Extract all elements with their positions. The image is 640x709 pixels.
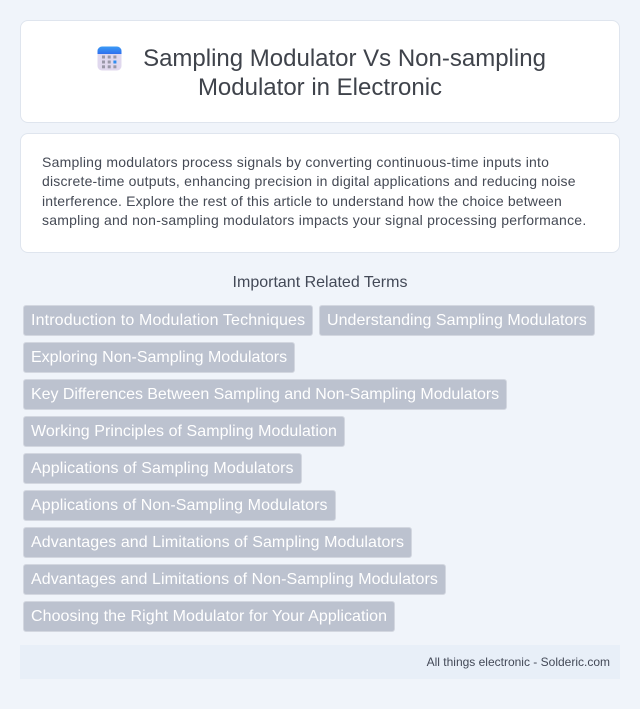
heading: related terms: Important Related Terms bbox=[233, 274, 407, 291]
tag: Introduction to Modulation Techniques bbox=[31, 312, 305, 329]
intro text: sampling and non-sampling modulators impacts your signal processing performance. bbox=[42, 212, 586, 228]
tag bbox=[23, 453, 302, 484]
icon: calendar bbox=[98, 46, 122, 70]
intro text bbox=[42, 154, 586, 228]
intro text: Sampling modulators process signals by converting continuous-time inputs into bbox=[42, 154, 549, 170]
tag: Working Principles of Sampling Modulation bbox=[31, 423, 337, 440]
tag: Understanding Sampling Modulators bbox=[327, 312, 587, 329]
tag: Advantages and Limitations of Sampling Modulators bbox=[31, 534, 404, 551]
tag: Key Differences Between Sampling and Non-Sampling Modulators bbox=[31, 386, 499, 403]
tag bbox=[319, 305, 595, 336]
header panel bbox=[20, 20, 620, 123]
tag: Choosing the Right Modulator for Your Application bbox=[31, 608, 387, 625]
tag: Applications of Sampling Modulators bbox=[31, 460, 294, 477]
intro panel bbox=[20, 133, 620, 253]
tag: Advantages and Limitations of Non-Sampling Modulators bbox=[31, 571, 438, 588]
tag bbox=[23, 305, 313, 336]
tag: Applications of Non-Sampling Modulators bbox=[31, 497, 328, 514]
tag bbox=[23, 379, 507, 410]
intro text: interference. Explore the rest of this article to understand how the choice between bbox=[42, 193, 562, 209]
title: Modulator in Electronic bbox=[198, 74, 442, 101]
tag bbox=[23, 564, 446, 595]
tag bbox=[23, 490, 336, 521]
footer bar bbox=[20, 645, 620, 679]
tag bbox=[23, 416, 345, 447]
tag: Exploring Non-Sampling Modulators bbox=[31, 349, 287, 366]
title bbox=[143, 45, 546, 101]
tag list bbox=[23, 305, 595, 632]
tag bbox=[23, 601, 395, 632]
tag bbox=[23, 527, 412, 558]
footer text: All things electronic - Solderic.com bbox=[427, 655, 610, 669]
tag bbox=[23, 342, 295, 373]
intro text: discrete-time outputs, enhancing precision in digital applications and reducing noise bbox=[42, 173, 576, 189]
title: Sampling Modulator Vs Non-sampling bbox=[143, 45, 546, 72]
